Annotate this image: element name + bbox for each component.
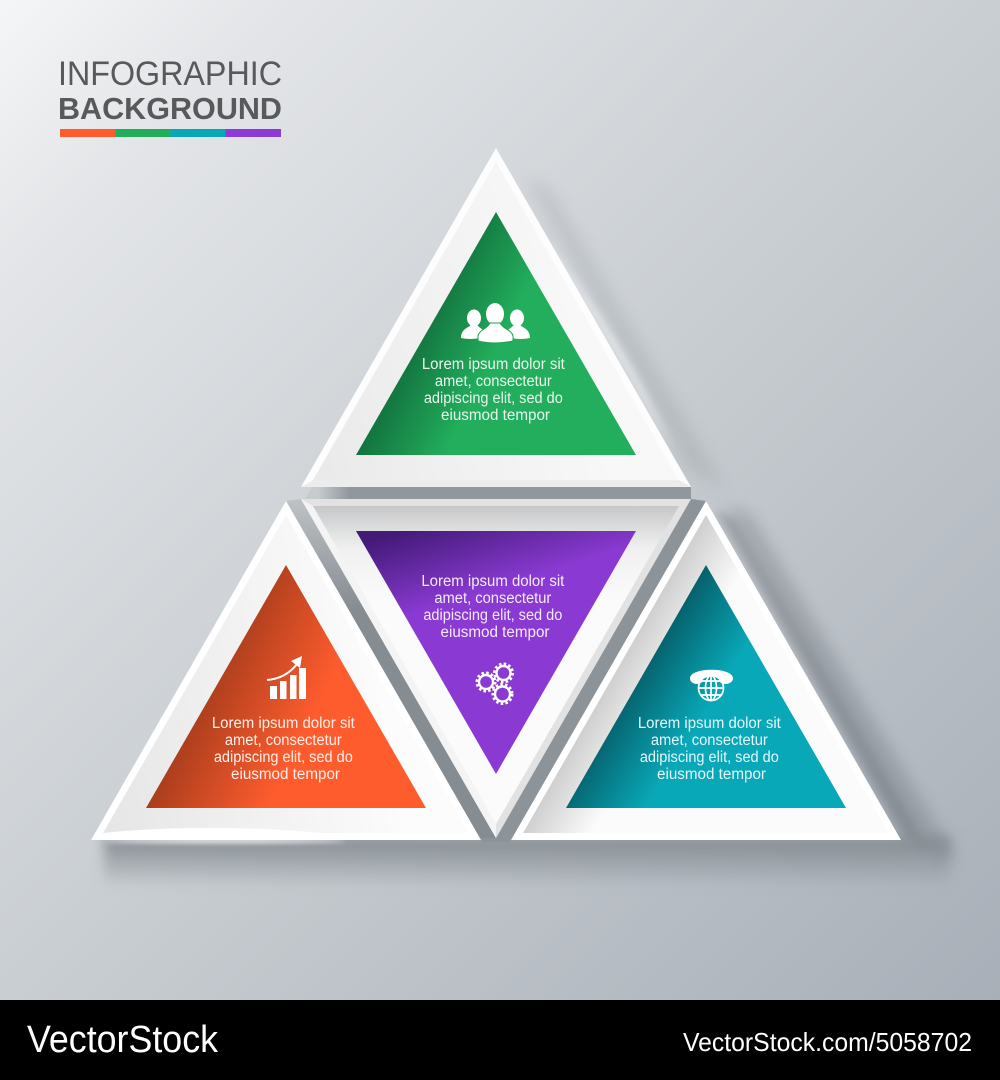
- footer logo: VectorStock: [27, 1019, 219, 1061]
- text: orange: amet, consectetur: [225, 732, 342, 749]
- panel: right teal triangle: [511, 501, 901, 840]
- title: INFOGRAPHIC: [58, 55, 282, 93]
- text: teal: amet, consectetur: [651, 732, 768, 749]
- text: orange: eiusmod tempor: [231, 766, 340, 783]
- text: green: adipiscing elit, sed do: [424, 390, 563, 407]
- title: [58, 55, 282, 126]
- text: green: Lorem ipsum dolor sit: [422, 356, 566, 373]
- panel: top green triangle: [301, 148, 691, 487]
- icon: people: [461, 303, 530, 343]
- text: green: amet, consectetur: [435, 373, 552, 390]
- icon: globe telephone: [690, 670, 733, 700]
- text: orange: adipiscing elit, sed do: [214, 749, 353, 766]
- panel: centre purple triangle: [301, 499, 691, 838]
- text: purple: eiusmod tempor: [440, 624, 550, 641]
- panel: left orange triangle: [91, 501, 481, 840]
- text: teal: eiusmod tempor: [657, 766, 766, 783]
- title colour bar: [60, 129, 281, 137]
- drop shadows: [104, 175, 958, 884]
- icon: gears: [477, 664, 512, 704]
- text: orange: Lorem ipsum dolor sit: [212, 715, 356, 732]
- highlight sheen on left triangle base: [91, 828, 360, 843]
- text: purple: adipiscing elit, sed do: [423, 607, 562, 624]
- title: BACKGROUND: [58, 91, 282, 126]
- shadow gaps between triangles: [286, 487, 706, 842]
- icon: bar chart with arrow: [267, 656, 306, 699]
- footer url: VectorStock.com/5058702: [683, 1027, 972, 1057]
- text: purple: amet, consectetur: [434, 590, 551, 607]
- text: green: eiusmod tempor: [441, 407, 550, 424]
- text: teal: adipiscing elit, sed do: [640, 749, 779, 766]
- footer bar: [0, 1000, 1000, 1080]
- text: teal: Lorem ipsum dolor sit: [638, 715, 782, 732]
- text: purple: Lorem ipsum dolor sit: [421, 573, 565, 590]
- highlight streak on top triangle: [532, 222, 672, 452]
